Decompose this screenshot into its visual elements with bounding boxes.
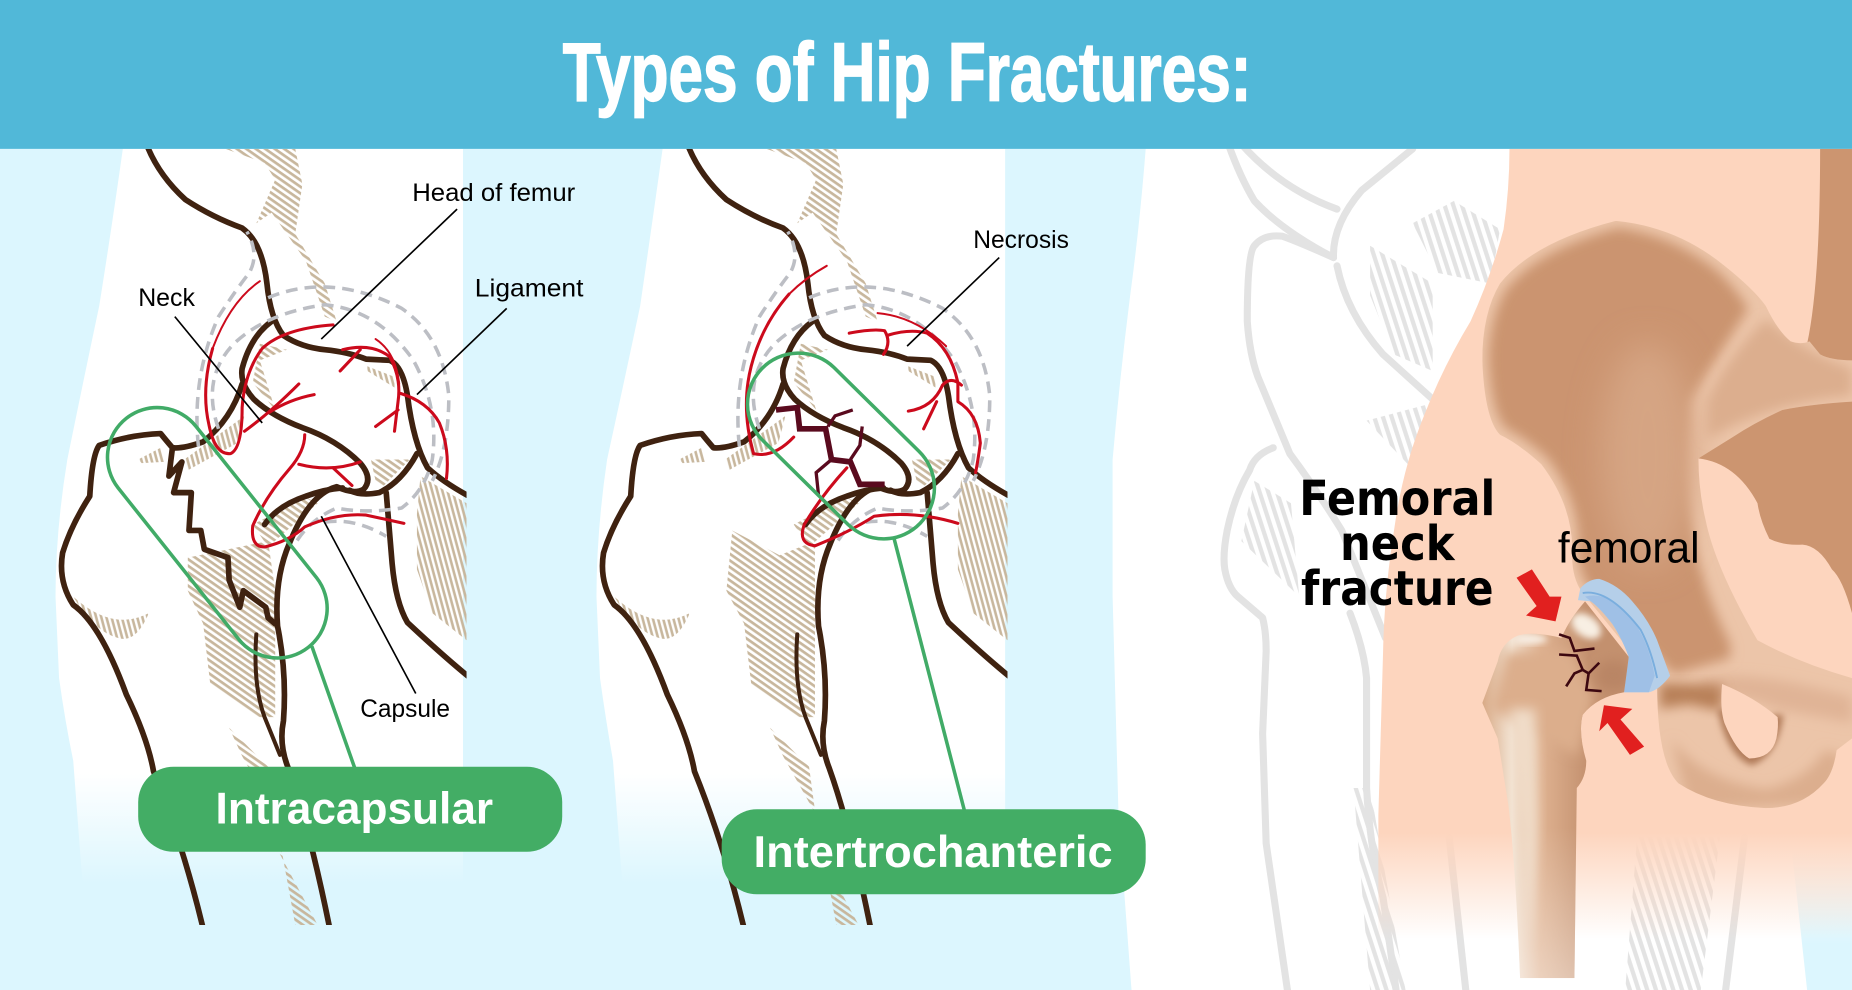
panel: white body area, intertrochanteric <box>596 149 1005 886</box>
label: Femoral neck fracture: fracture <box>1301 561 1494 617</box>
acetabulum cartilage <box>1578 579 1670 692</box>
hatching <box>614 149 1007 925</box>
label: Femoral neck fracture: Femoral <box>1299 471 1495 527</box>
leader line: zone to Intertrochanteric <box>894 539 965 813</box>
darker tissue top right <box>1807 149 1852 366</box>
title: Types of Hip Fractures: <box>563 25 1251 118</box>
label: Necrosis: Necrosis <box>973 226 1069 254</box>
label: Head of femur: Head of femur <box>412 179 576 207</box>
pill: Intertrochanteric: Intertrochanteric <box>754 826 1113 877</box>
panel: white area behind the right illustration <box>1113 149 1852 990</box>
leader line: zone to Intracapsular <box>312 646 356 770</box>
darker tissue lower right <box>1698 390 1852 613</box>
capsule dashes <box>738 232 990 543</box>
hatching <box>73 149 467 925</box>
label: Necrosis <box>907 226 1069 346</box>
pill: Intertrochanteric <box>722 809 1146 894</box>
label: Capsule <box>321 516 450 723</box>
fracture zone outline <box>748 353 934 539</box>
illustration: hip joint <box>1465 149 1852 986</box>
bottom right blue corner <box>1791 839 1852 990</box>
pill: Intracapsular <box>138 767 562 852</box>
arrow: upper red arrow <box>1517 569 1561 621</box>
label: Neck <box>138 284 262 423</box>
bone outline <box>61 144 469 933</box>
blood vessels <box>746 266 980 546</box>
label: Neck: Neck <box>138 284 195 312</box>
fracture zone outline <box>107 408 327 658</box>
illustration: intertrochanteric fracture <box>602 144 1010 933</box>
pelvis <box>1482 221 1852 808</box>
panel: peach body <box>1378 149 1852 945</box>
label: Femoral neck fracture <box>1299 471 1495 617</box>
obturator hole <box>1721 684 1778 758</box>
ghost skeleton background <box>1224 144 1745 990</box>
fracture crack <box>776 408 885 495</box>
bone outline <box>602 144 1010 933</box>
blood vessels <box>206 281 447 547</box>
femur <box>1482 602 1629 978</box>
header band <box>0 0 1852 149</box>
panel: white body area, intracapsular <box>56 149 463 886</box>
arrow: lower red arrow <box>1599 705 1644 755</box>
illustration: intracapsular fracture <box>61 144 469 933</box>
label: Ligament: Ligament <box>475 275 583 303</box>
label: femoral: femoral <box>1558 523 1700 572</box>
capsule dashes <box>197 232 449 543</box>
femoral neck crack <box>1559 634 1602 691</box>
label: Femoral neck fracture: neck <box>1340 516 1456 572</box>
label: Ligament <box>417 275 583 395</box>
pill: Intracapsular: Intracapsular <box>216 782 493 833</box>
label: Capsule: Capsule <box>360 695 450 723</box>
label: Head of femur <box>321 179 576 339</box>
